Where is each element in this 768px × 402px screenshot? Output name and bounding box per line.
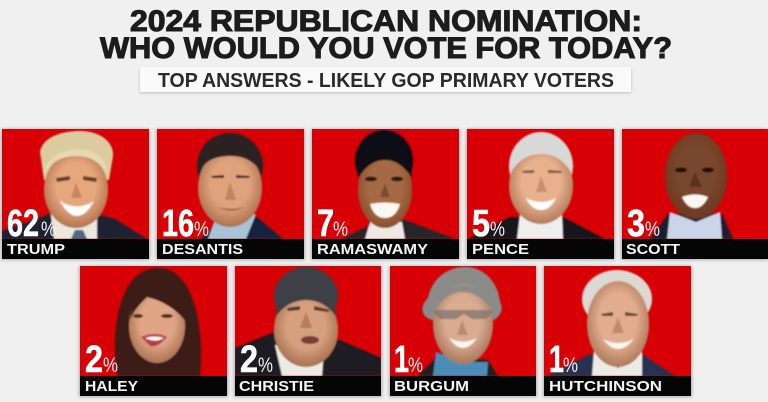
name band: Haley: HALEY bbox=[85, 378, 138, 395]
percentage: 16%: % bbox=[194, 218, 209, 241]
name band: Hutchinson: HUTCHINSON bbox=[549, 378, 662, 395]
name band: Trump: TRUMP bbox=[7, 241, 65, 258]
card: Burgum bbox=[389, 266, 537, 397]
name band: Hutchinson bbox=[544, 376, 691, 396]
percentage: 5% bbox=[472, 203, 505, 245]
card: Christie bbox=[234, 266, 382, 397]
portrait: Christie bbox=[235, 267, 381, 376]
title bbox=[100, 5, 672, 65]
name band: Christie: CHRISTIE bbox=[239, 378, 314, 395]
card: Pence bbox=[466, 129, 615, 260]
name band: Scott: SCOTT bbox=[626, 241, 680, 258]
name band: Scott bbox=[622, 239, 768, 259]
percentage: 3% bbox=[627, 203, 660, 245]
percentage: 3%: 3 bbox=[627, 203, 645, 245]
title: 2024 REPUBLICAN NOMINATION: bbox=[130, 5, 642, 38]
percentage: 2% bbox=[85, 339, 118, 381]
portrait: Trump bbox=[2, 131, 147, 239]
name band: Ramaswamy: RAMASWAMY bbox=[317, 241, 428, 258]
card: Scott bbox=[621, 129, 768, 260]
name band: Ramaswamy bbox=[312, 239, 459, 259]
name band: Pence: PENCE bbox=[472, 241, 529, 258]
percentage: 2%: % bbox=[258, 354, 273, 377]
portrait: Scott bbox=[650, 133, 733, 239]
title: WHO WOULD YOU VOTE FOR TODAY? bbox=[100, 32, 672, 65]
subtitle banner: TOP ANSWERS - LIKELY GOP PRIMARY VOTERS bbox=[158, 70, 614, 92]
percentage: 5%: % bbox=[490, 218, 505, 241]
percentage: 1%: % bbox=[563, 354, 578, 377]
percentage: 1%: 1 bbox=[394, 339, 409, 381]
name band: DeSantis: DESANTIS bbox=[162, 241, 243, 258]
card: DeSantis bbox=[156, 129, 305, 260]
percentage: 62%: 62 bbox=[7, 203, 39, 245]
name band: Haley bbox=[80, 376, 227, 396]
card: Haley bbox=[79, 266, 228, 397]
name band: Pence bbox=[467, 239, 614, 259]
percentage: 16%: 16 bbox=[162, 203, 194, 245]
card: Trump bbox=[1, 129, 150, 260]
name band: DeSantis bbox=[157, 239, 304, 259]
percentage: 5%: 5 bbox=[472, 203, 490, 245]
name band: Burgum bbox=[390, 376, 536, 396]
name band: Trump bbox=[2, 239, 149, 259]
portrait: DeSantis bbox=[197, 133, 283, 239]
name band: Christie bbox=[235, 376, 381, 396]
percentage: 2%: 2 bbox=[240, 339, 258, 381]
percentage: 2%: 2 bbox=[85, 339, 103, 381]
percentage: 1%: % bbox=[408, 354, 423, 377]
percentage: 1%: 1 bbox=[549, 339, 564, 381]
portrait: Ramaswamy bbox=[342, 130, 455, 239]
percentage: 2% bbox=[240, 339, 273, 381]
portrait: Pence bbox=[468, 132, 605, 239]
percentage: 7%: 7 bbox=[317, 203, 334, 245]
card: Hutchinson bbox=[543, 266, 692, 397]
percentage: 3%: % bbox=[645, 218, 660, 241]
name band: Burgum: BURGUM bbox=[394, 378, 469, 395]
portrait: Haley bbox=[115, 268, 201, 376]
card: Ramaswamy bbox=[311, 129, 460, 260]
percentage: 7%: % bbox=[333, 218, 348, 241]
percentage: 62%: % bbox=[41, 218, 56, 241]
percentage: 7% bbox=[317, 203, 348, 245]
percentage: 2%: % bbox=[103, 354, 118, 377]
portrait: Hutchinson bbox=[548, 270, 675, 376]
portrait: Burgum bbox=[418, 267, 502, 376]
